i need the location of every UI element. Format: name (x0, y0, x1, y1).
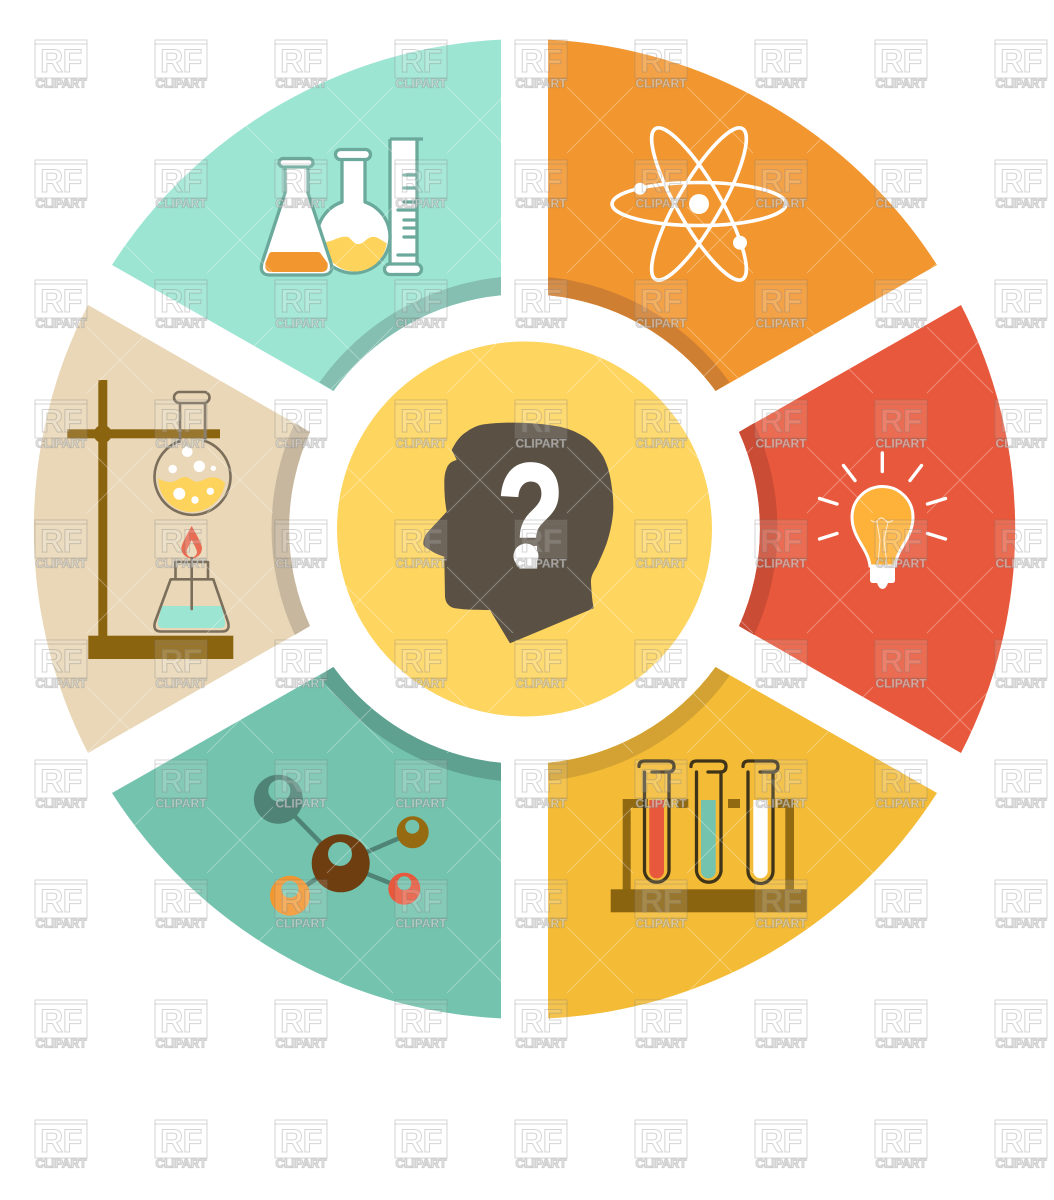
watermark grid: RF (880, 283, 922, 319)
watermark grid: CLIPART (395, 916, 447, 930)
watermark grid: CLIPART (155, 796, 207, 810)
watermark grid: RF (40, 883, 82, 919)
watermark grid: RF (640, 163, 682, 199)
watermark grid: CLIPART (395, 316, 447, 330)
watermark grid: CLIPART (875, 1156, 927, 1170)
watermark grid: CLIPART (395, 676, 447, 690)
inner band: red shade (739, 423, 777, 635)
watermark grid: CLIPART (755, 916, 807, 930)
watermark grid: RF (880, 1003, 922, 1039)
icon: atom (612, 118, 786, 290)
watermark grid: CLIPART (35, 676, 87, 690)
icon: conical flask, round flask and measuring cylinder (261, 139, 423, 275)
watermark grid: RF (640, 523, 682, 559)
watermark grid: RF (1000, 403, 1042, 439)
watermark grid: RF (160, 403, 202, 439)
watermark grid: CLIPART (995, 916, 1047, 930)
watermark grid: CLIPART (35, 556, 87, 570)
watermark grid: CLIPART (995, 1036, 1047, 1050)
watermark grid: CLIPART (635, 436, 687, 450)
panel: bottom-right test tubes segment (548, 667, 937, 1018)
watermark grid: CLIPART (755, 436, 807, 450)
watermark grid: CLIPART (515, 196, 567, 210)
watermark grid: RF (280, 643, 322, 679)
watermark grid: RF (520, 763, 562, 799)
watermark grid: CLIPART (35, 796, 87, 810)
watermark grid: RF (520, 43, 562, 79)
watermark grid: RF (1000, 283, 1042, 319)
icon: head silhouette with question mark: ? (497, 433, 564, 599)
watermark grid: CLIPART (755, 1156, 807, 1170)
watermark grid: CLIPART (515, 916, 567, 930)
watermark grid: CLIPART (515, 1036, 567, 1050)
segment shape: mint (112, 40, 501, 391)
watermark grid: RF (400, 883, 442, 919)
watermark grid: CLIPART (875, 1036, 927, 1050)
segment shape: teal (112, 667, 501, 1018)
watermark grid: RF (160, 1123, 202, 1159)
watermark grid: CLIPART (155, 1036, 207, 1050)
watermark grid: CLIPART (755, 316, 807, 330)
watermark grid: CLIPART (155, 556, 207, 570)
watermark grid: RF (400, 523, 442, 559)
watermark grid: CLIPART (155, 676, 207, 690)
watermark grid: CLIPART (875, 796, 927, 810)
watermark grid: RF (40, 283, 82, 319)
watermark grid: CLIPART (395, 1036, 447, 1050)
inner band: beige shade (272, 423, 310, 635)
icon: light bulb with rays (820, 453, 946, 589)
watermark grid: RF (280, 43, 322, 79)
watermark grid: RF (40, 1123, 82, 1159)
watermark grid: RF (400, 1003, 442, 1039)
watermark grid: CLIPART (635, 676, 687, 690)
watermark grid: CLIPART (875, 916, 927, 930)
watermark grid: RF (520, 1123, 562, 1159)
watermark grid: CLIPART (275, 1036, 327, 1050)
watermark grid: RF (760, 43, 802, 79)
watermark grid: RF (520, 1003, 562, 1039)
watermark grid: RF (640, 43, 682, 79)
watermark grid: RF (760, 883, 802, 919)
watermark grid: CLIPART (395, 76, 447, 90)
watermark grid: RF (40, 163, 82, 199)
watermark grid: RF (760, 403, 802, 439)
watermark grid: RF (1000, 163, 1042, 199)
panel: right light bulb segment (739, 305, 1015, 753)
watermark grid: CLIPART (35, 916, 87, 930)
icon: test tubes in rack (611, 761, 807, 912)
watermark grid: RF (400, 163, 442, 199)
watermark grid: RF (160, 1003, 202, 1039)
watermark grid: CLIPART (995, 436, 1047, 450)
watermark grid: RF (880, 883, 922, 919)
watermark grid: CLIPART (275, 556, 327, 570)
watermark grid: RF (1000, 763, 1042, 799)
watermark grid: CLIPART (155, 436, 207, 450)
watermark grid: CLIPART (995, 76, 1047, 90)
watermark grid: RF (160, 43, 202, 79)
watermark grid: RF (640, 763, 682, 799)
watermark grid: CLIPART (155, 1156, 207, 1170)
watermark grid: RF (1000, 883, 1042, 919)
watermark grid: CLIPART (395, 796, 447, 810)
watermark grid: CLIPART (635, 196, 687, 210)
watermark grid: CLIPART (515, 76, 567, 90)
icon: molecule (254, 775, 429, 916)
watermark grid: CLIPART (515, 436, 567, 450)
watermark grid: CLIPART (275, 676, 327, 690)
watermark grid: RF (760, 163, 802, 199)
watermark grid: CLIPART (35, 76, 87, 90)
watermark grid: CLIPART (995, 1156, 1047, 1170)
watermark grid: RF (640, 1003, 682, 1039)
watermark grid: RF (160, 523, 202, 559)
watermark grid: CLIPART (635, 916, 687, 930)
watermark grid: CLIPART (395, 436, 447, 450)
watermark grid: CLIPART (35, 1036, 87, 1050)
watermark grid: CLIPART (35, 196, 87, 210)
watermark grid: RF (160, 283, 202, 319)
watermark grid: CLIPART (155, 76, 207, 90)
watermark grid: RF (520, 523, 562, 559)
watermark grid: CLIPART (635, 316, 687, 330)
watermark grid: RF (640, 1123, 682, 1159)
watermark grid: CLIPART (755, 76, 807, 90)
watermark grid: RF (760, 1123, 802, 1159)
watermark grid: RF (640, 643, 682, 679)
watermark grid: RF (520, 643, 562, 679)
panel: top-left flasks segment (112, 40, 501, 391)
watermark grid: RF (400, 763, 442, 799)
watermark grid: RF (40, 523, 82, 559)
watermark grid: RF (280, 403, 322, 439)
watermark grid: RF (1000, 523, 1042, 559)
watermark grid: RF (880, 1123, 922, 1159)
watermark grid: CLIPART (635, 76, 687, 90)
watermark grid: CLIPART (275, 76, 327, 90)
watermark grid: CLIPART (995, 196, 1047, 210)
watermark grid: CLIPART (995, 796, 1047, 810)
watermark grid: CLIPART (875, 196, 927, 210)
watermark grid: RF (1000, 1123, 1042, 1159)
watermark grid: CLIPART (755, 556, 807, 570)
inner band: orange shade (548, 277, 730, 391)
watermark grid: RF (760, 1003, 802, 1039)
watermark grid: RF (280, 523, 322, 559)
watermark grid: CLIPART (275, 796, 327, 810)
watermark grid: RF (760, 643, 802, 679)
watermark grid: CLIPART (275, 196, 327, 210)
watermark grid: RF (640, 403, 682, 439)
watermark grid: RF (520, 283, 562, 319)
inner band: amber shade (548, 667, 730, 781)
icon: retort stand with flask and burner (67, 380, 233, 659)
segment shape: beige (34, 305, 310, 753)
watermark grid: RF (160, 643, 202, 679)
watermark grid: RF (880, 763, 922, 799)
panel: top-right atom segment (548, 40, 937, 391)
segment shape: orange (548, 40, 937, 391)
watermark grid: RF (280, 883, 322, 919)
watermark grid: RF (40, 403, 82, 439)
watermark grid: CLIPART (515, 796, 567, 810)
watermark grid: CLIPART (635, 556, 687, 570)
watermark grid: CLIPART (635, 1036, 687, 1050)
watermark grid: CLIPART (515, 1156, 567, 1170)
panel: bottom-left molecule segment (112, 667, 501, 1018)
watermark grid: CLIPART (275, 1156, 327, 1170)
watermark grid: CLIPART (155, 196, 207, 210)
watermark grid: RF (1000, 1003, 1042, 1039)
watermark grid: CLIPART (995, 676, 1047, 690)
icon: head silhouette with question mark (423, 423, 613, 643)
watermark grid: CLIPART (995, 556, 1047, 570)
segment shape: amber (548, 667, 937, 1018)
watermark grid: RF (760, 283, 802, 319)
watermark grid: CLIPART (635, 796, 687, 810)
watermark grid: RF (160, 883, 202, 919)
center circle (337, 342, 712, 716)
watermark grid: CLIPART (755, 196, 807, 210)
watermark grid: RF (40, 643, 82, 679)
watermark grid: CLIPART (155, 316, 207, 330)
watermark grid: RF (280, 283, 322, 319)
watermark grid: RF (1000, 43, 1042, 79)
watermark grid: RF (760, 763, 802, 799)
watermark grid: RF (40, 1003, 82, 1039)
watermark grid: CLIPART (875, 316, 927, 330)
watermark grid: RF (520, 403, 562, 439)
watermark grid: RF (760, 523, 802, 559)
watermark grid: CLIPART (395, 196, 447, 210)
watermark grid: CLIPART (995, 316, 1047, 330)
watermark grid: CLIPART (275, 316, 327, 330)
watermark grid: CLIPART (875, 556, 927, 570)
watermark grid: CLIPART (35, 1156, 87, 1170)
watermark grid: CLIPART (755, 1036, 807, 1050)
watermark grid: RF (280, 1003, 322, 1039)
watermark grid: CLIPART (275, 916, 327, 930)
watermark grid: CLIPART (755, 676, 807, 690)
watermark grid: RF (40, 763, 82, 799)
watermark grid: CLIPART (395, 1156, 447, 1170)
watermark grid: RF (400, 283, 442, 319)
watermark grid: RF (280, 1123, 322, 1159)
panel: left burner segment (34, 305, 310, 753)
watermark grid: CLIPART (155, 916, 207, 930)
watermark grid: RF (400, 1123, 442, 1159)
inner band: mint shade (320, 277, 501, 391)
watermark grid: CLIPART (515, 316, 567, 330)
watermark grid: CLIPART (35, 316, 87, 330)
watermark grid: RF (520, 163, 562, 199)
watermark grid: CLIPART (875, 676, 927, 690)
watermark grid: RF (280, 163, 322, 199)
watermark grid: RF (160, 763, 202, 799)
watermark grid: RF (520, 883, 562, 919)
watermark grid: RF (880, 403, 922, 439)
watermark grid: CLIPART (395, 556, 447, 570)
watermark grid: CLIPART (275, 436, 327, 450)
watermark grid: CLIPART (515, 676, 567, 690)
watermark grid: RF (160, 163, 202, 199)
watermark grid: RF (640, 283, 682, 319)
watermark grid: CLIPART (635, 1156, 687, 1170)
inner band: teal shade (320, 667, 501, 781)
watermark grid: RF (880, 43, 922, 79)
watermark grid: RF (400, 403, 442, 439)
watermark grid: CLIPART (875, 436, 927, 450)
watermark grid: RF (880, 523, 922, 559)
segment shape: red (739, 305, 1015, 753)
watermark grid: RF (1000, 643, 1042, 679)
watermark grid: RF (880, 643, 922, 679)
watermark grid: RF (400, 643, 442, 679)
watermark grid: CLIPART (755, 796, 807, 810)
watermark grid: RF (880, 163, 922, 199)
watermark grid: CLIPART (875, 76, 927, 90)
watermark grid: RF (400, 43, 442, 79)
watermark grid: RF (280, 763, 322, 799)
watermark grid: RF (40, 43, 82, 79)
watermark grid: CLIPART (515, 556, 567, 570)
watermark grid: CLIPART (35, 436, 87, 450)
watermark grid: RF (640, 883, 682, 919)
